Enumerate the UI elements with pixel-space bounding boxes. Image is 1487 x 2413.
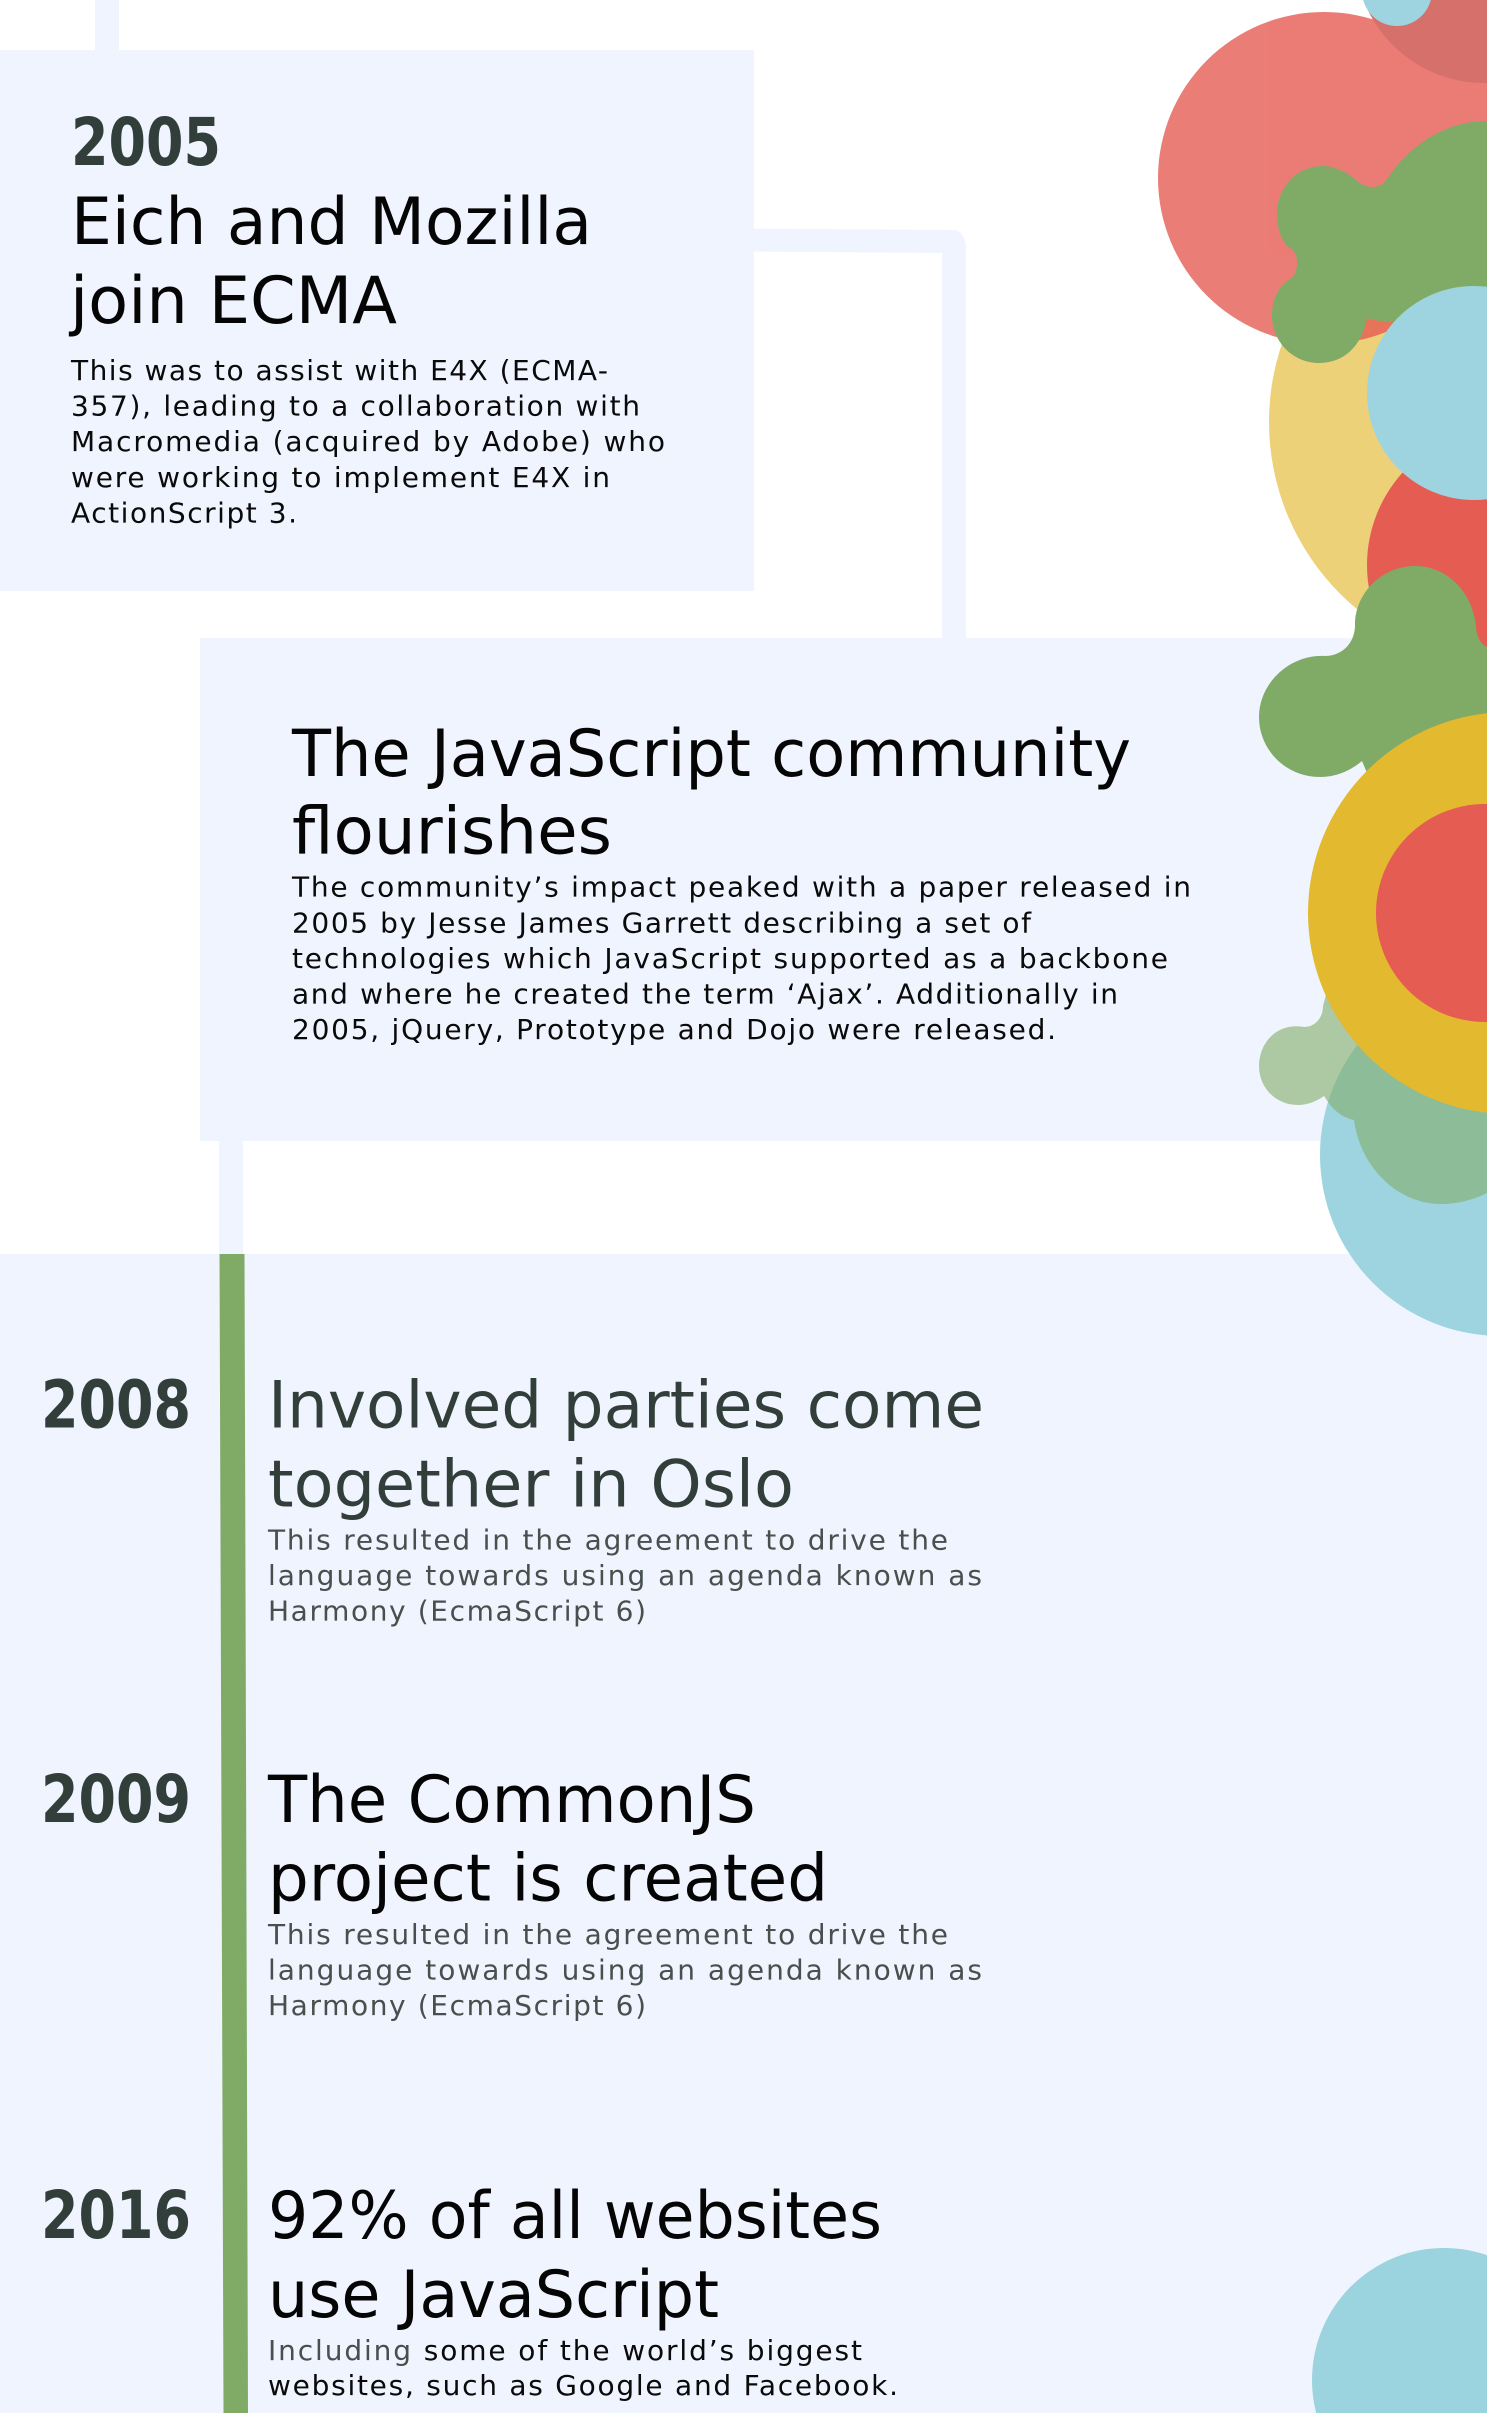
- body text: Harmony agreement repeat: language towards using an agenda known as: [268, 1954, 982, 1986]
- decorative blob cluster: top right: [1158, 0, 1487, 703]
- panel: 2005 Eich and Mozilla: [0, 50, 754, 591]
- body text: biggest websites: Including some of the world’s biggest: [268, 2334, 862, 2367]
- heading: 92% of all websites use JavaScript: [268, 2179, 882, 2333]
- year: 2005: 2005: [71, 104, 221, 181]
- body text: biggest websites: [268, 2334, 898, 2402]
- year: 2008: 2008: [41, 1366, 191, 1444]
- heading: The JavaScript community flourishes: The JavaScript community: [291, 717, 1131, 792]
- body text: community impact: [291, 870, 1191, 1046]
- body text: Harmony agreement: [267, 1524, 982, 1628]
- heading: The CommonJS project is created: [267, 1763, 828, 1916]
- heading: The CommonJS project is created: The CommonJS: [267, 1763, 756, 1838]
- body text: E4X collaboration: ActionScript 3.: [71, 496, 297, 530]
- year: 2016: 2016: [41, 2177, 191, 2254]
- body text: Harmony agreement repeat: Harmony (EcmaScript 6): [268, 1989, 646, 2022]
- body text: E4X collaboration: [70, 354, 665, 530]
- heading: Eich and Mozilla join ECMA: Eich and Mozilla: [71, 185, 592, 260]
- decorative blob cluster: middle right: [1259, 566, 1487, 1336]
- panel: JavaScript community flourishes: [200, 638, 1487, 1141]
- heading: Involved parties come together in Oslo: Involved parties come: [268, 1368, 984, 1444]
- body text: community impact: The community’s impact peaked with a paper released in: [291, 870, 1191, 904]
- body text: community impact: and where he created the term ‘Ajax’. Additionally in: [292, 978, 1118, 1010]
- body text: community impact: technologies which JavaScript supported as a backbone: [292, 942, 1168, 975]
- timeline line: [220, 1254, 248, 2413]
- body text: Harmony agreement repeat: This resulted in the agreement to drive the: [267, 1918, 948, 1951]
- decorative circle: bottom right: [1312, 2248, 1487, 2413]
- body text: Harmony agreement: Harmony (EcmaScript 6): [268, 1594, 646, 1628]
- body text: E4X collaboration: were working to implement E4X in: [71, 461, 610, 494]
- year: 2009: 2009: [41, 1761, 191, 1838]
- heading: 92% of all websites use JavaScript: use JavaScript: [268, 2258, 719, 2333]
- timeline entry: 2008: [41, 1366, 984, 1628]
- body text: E4X collaboration: This was to assist with E4X (ECMA-: [70, 354, 608, 387]
- body text: E4X collaboration: 357), leading to a collaboration with: [71, 390, 640, 422]
- heading: Eich and Mozilla join ECMA: join ECMA: [68, 264, 397, 339]
- heading: The CommonJS project is created: project is created: [268, 1842, 828, 1916]
- heading: The JavaScript community flourishes: [291, 717, 1131, 870]
- heading: The JavaScript community flourishes: flourishes: [292, 794, 612, 870]
- body text: E4X collaboration: Macromedia (acquired by Adobe) who: [71, 425, 665, 458]
- timeline entry: 2016: [41, 2177, 898, 2402]
- heading: Eich and Mozilla join ECMA: [68, 185, 592, 339]
- body text: community impact: 2005 by Jesse James Garrett describing a set of: [292, 906, 1032, 940]
- body text: Harmony agreement: This resulted in the agreement to drive the: [267, 1524, 948, 1556]
- heading: Involved parties come together in Oslo: [268, 1368, 984, 1522]
- timeline entry: 2009: [41, 1761, 982, 2022]
- body text: Harmony agreement: language towards using an agenda known as: [268, 1559, 982, 1592]
- body text: biggest websites: websites, such as Google and Facebook.: [268, 2369, 898, 2402]
- body text: Harmony agreement repeat: [267, 1918, 982, 2022]
- panel: lower timeline background: [0, 1254, 1487, 2413]
- heading: Involved parties come together in Oslo: together in Oslo: [268, 1448, 794, 1522]
- body text: community impact: 2005, jQuery, Prototype and Dojo were released.: [292, 1013, 1056, 1046]
- heading: 92% of all websites use JavaScript: 92% of all websites: [268, 2179, 882, 2254]
